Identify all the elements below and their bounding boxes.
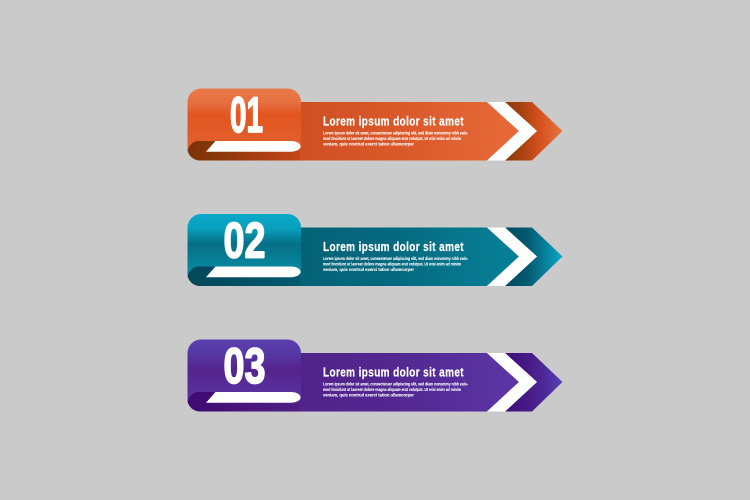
body text 02: Lorem ipsum dolor sit amet, consectetuer adipiscing elit, sed diam nonummy nibh euis-	[323, 256, 468, 261]
body text 01: veniam, quis nostrud exerci tation ullamcorper	[323, 142, 414, 147]
number tab 03	[188, 340, 301, 402]
fold shadow 03	[187, 391, 300, 412]
body text 01: mod tincidunt ut laoreet dolore magna aliquam erat volutpat. Ut wisi enim ad minim	[323, 136, 461, 141]
number tab 01	[188, 88, 301, 151]
heading 03: Lorem ipsum dolor sit amet	[323, 365, 464, 380]
panel: item 03 purple	[187, 338, 562, 412]
number tab 02	[188, 214, 301, 276]
white strip 02	[206, 266, 301, 277]
panel: item 02 teal	[187, 212, 562, 286]
dark arrow tip 03	[505, 353, 562, 412]
number 01: 01	[230, 87, 263, 143]
white strip 01	[206, 141, 301, 152]
body text 03: mod tincidunt ut laoreet dolore magna aliquam erat volutpat. Ut wisi enim ad minim	[323, 387, 461, 392]
dark arrow tip 02	[505, 228, 562, 286]
body text 01: Lorem ipsum dolor sit amet, consectetuer adipiscing elit, sed diam nonummy nibh euis-	[323, 130, 468, 135]
body text 03: veniam, quis nostrud exerci tation ullamcorper	[323, 393, 414, 398]
white strip 03	[206, 392, 301, 403]
heading 02: Lorem ipsum dolor sit amet	[323, 239, 464, 254]
arrow bar 02	[200, 228, 519, 286]
body text 02: veniam, quis nostrud exerci tation ullamcorper	[323, 267, 414, 272]
number 03: 03	[224, 338, 266, 394]
arrow bar 01	[200, 102, 519, 160]
fold shadow 02	[187, 266, 300, 286]
panel: item 01 orange	[187, 87, 562, 161]
body text 02	[323, 256, 468, 272]
number 02: 02	[224, 212, 266, 268]
arrow bar 03	[200, 353, 519, 412]
body text 03: Lorem ipsum dolor sit amet, consectetuer adipiscing elit, sed diam nonummy nibh euis-	[323, 381, 468, 386]
body text 03	[323, 381, 468, 398]
white chevron 02	[487, 228, 537, 286]
body text 02: mod tincidunt ut laoreet dolore magna aliquam erat volutpat. Ut wisi enim ad minim	[323, 262, 461, 266]
body text 01	[323, 130, 468, 147]
dark arrow tip 01	[505, 102, 562, 160]
white chevron 01	[487, 102, 537, 160]
white chevron 03	[487, 353, 537, 412]
fold shadow 01	[187, 140, 300, 161]
heading 01: Lorem ipsum dolor sit amet	[323, 114, 464, 129]
